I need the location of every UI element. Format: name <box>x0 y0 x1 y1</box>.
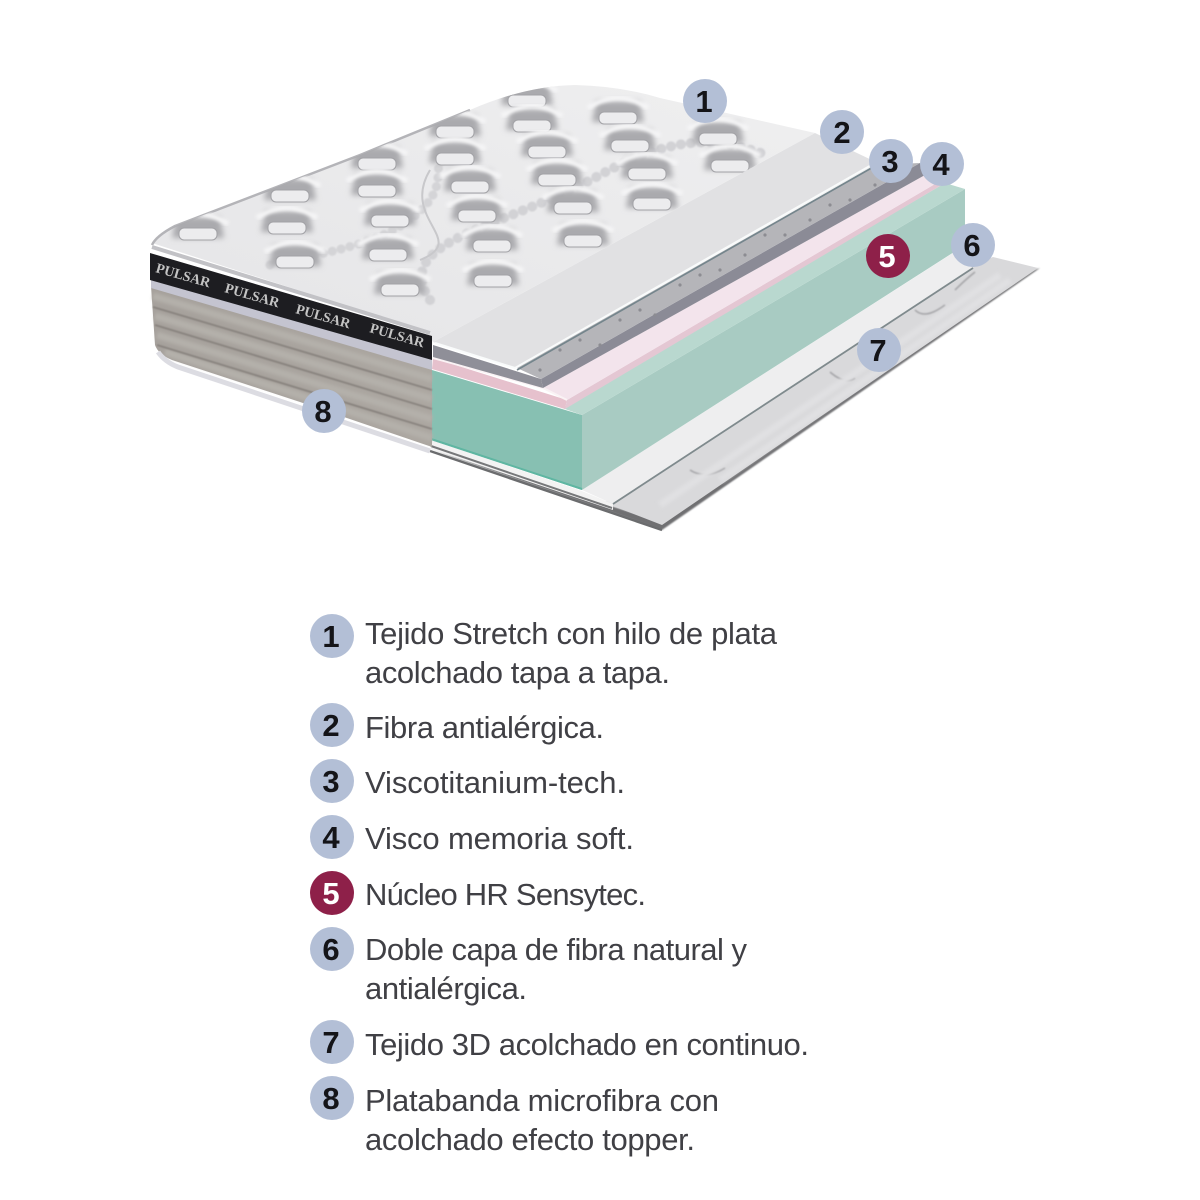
mattress side panel <box>150 253 432 451</box>
badge 5: 5 <box>878 239 896 274</box>
black brand band: PULSAR <box>368 321 427 352</box>
legend item 8: 8 <box>322 1081 340 1116</box>
badge 1: 1 <box>695 84 713 119</box>
legend item 7: 7 <box>322 1025 340 1060</box>
legend item 5 <box>310 871 646 915</box>
badge 4: 4 <box>932 147 950 182</box>
quilted top fabric <box>152 81 815 342</box>
legend item 6: 6 <box>322 932 340 967</box>
legend item 4: Visco memoria soft. <box>365 821 634 856</box>
legend item 2 <box>310 703 604 747</box>
legend item 2: 2 <box>322 708 340 743</box>
badge 7 <box>857 328 901 372</box>
legend item 1 <box>310 614 778 690</box>
base quilted fabric layer <box>430 257 1040 530</box>
black brand band: PULSAR <box>294 302 353 333</box>
badge 2 <box>820 110 864 154</box>
legend item 2: Fibra antialérgica. <box>365 710 604 745</box>
legend item 3: Viscotitanium-tech. <box>365 765 625 800</box>
layer 6: natural fibre <box>430 253 973 530</box>
layer 2: hypoallergenic fibre <box>433 133 878 370</box>
legend item 1: acolchado tapa a tapa. <box>365 655 670 690</box>
legend item 8 <box>310 1076 719 1157</box>
legend item 1: Tejido Stretch con hilo de plata <box>365 616 778 651</box>
legend item 7: Tejido 3D acolchado en continuo. <box>365 1027 809 1062</box>
layer 4: soft memory foam <box>432 175 945 409</box>
legend item 8: acolchado efecto topper. <box>365 1122 695 1157</box>
badge 3: 3 <box>881 144 899 179</box>
legend item 4 <box>310 815 634 859</box>
black brand band: PULSAR <box>154 261 213 292</box>
legend item 6: antialérgica. <box>365 971 527 1006</box>
legend item 5: Núcleo HR Sensytec. <box>365 877 646 912</box>
black brand band <box>150 253 432 360</box>
badge 4 <box>920 142 964 186</box>
layer 3: viscotitanium <box>433 163 925 388</box>
legend item 3 <box>310 759 625 803</box>
badge 7: 7 <box>869 333 887 368</box>
legend <box>310 614 809 1157</box>
badge 2: 2 <box>833 115 851 150</box>
badge 8 <box>302 389 346 433</box>
badge 6 <box>951 223 995 267</box>
legend item 1: 1 <box>322 619 340 654</box>
badge 8: 8 <box>314 394 332 429</box>
legend item 6: Doble capa de fibra natural y <box>365 932 748 967</box>
badge 5 <box>866 234 910 278</box>
legend item 8: Platabanda microfibra con <box>365 1083 719 1118</box>
badge 3 <box>869 139 913 183</box>
quilting tufts <box>168 81 760 296</box>
badge 1 <box>683 79 727 123</box>
badge 6: 6 <box>963 228 981 263</box>
legend item 3: 3 <box>322 764 340 799</box>
legend item 5: 5 <box>322 876 340 911</box>
layer 5: HR core <box>431 183 965 490</box>
legend item 4: 4 <box>322 820 340 855</box>
black brand band: PULSAR <box>223 281 282 312</box>
mattress illustration <box>150 81 1040 530</box>
legend item 6 <box>310 927 748 1006</box>
